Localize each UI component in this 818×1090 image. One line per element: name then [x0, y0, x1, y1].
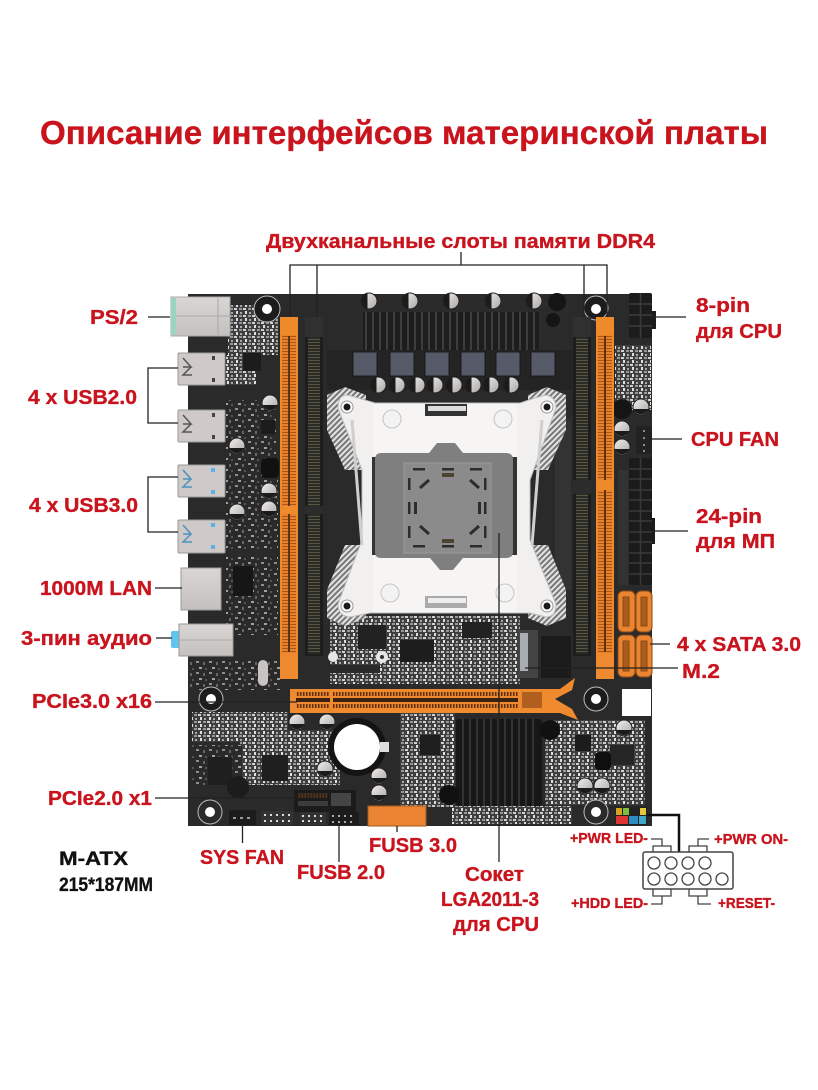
pins: [648, 857, 728, 885]
FUSB 3.0 connector: [368, 806, 426, 826]
label: CPU FAN: CPU FAN: [691, 428, 779, 451]
PS/2 port: [171, 297, 230, 336]
VRM chokes: [353, 352, 555, 376]
8-pin CPU power connector: [629, 293, 656, 338]
white label: [622, 689, 651, 716]
header pins: [541, 636, 571, 678]
label: PCIe3.0 x16: PCIe3.0 x16: [32, 690, 152, 713]
DDR4 slot orange left: [280, 317, 298, 679]
label: socket: для CPU: [453, 913, 539, 936]
panel: motherboard: [171, 293, 656, 826]
LAN port: [181, 568, 221, 610]
label: USB3.0: 4 x USB3.0: [29, 494, 138, 517]
label: HDD LED: +HDD LED-: [571, 895, 648, 912]
label: SATA: 4 x SATA 3.0: [677, 633, 801, 656]
mounting hole right: [584, 687, 608, 711]
thick cable: [647, 815, 679, 852]
label: SYS FAN: SYS FAN: [200, 846, 284, 869]
other headers: [261, 811, 326, 825]
audio port: [171, 624, 233, 656]
top capacitors: [361, 293, 566, 327]
label: socket: Сокет: [465, 863, 524, 886]
mounting hole top right: [584, 296, 608, 320]
board PCB: [188, 294, 652, 826]
mounting hole top left: [254, 296, 280, 322]
CPU fan header: [636, 426, 652, 454]
SYS FAN header: [229, 810, 256, 825]
label: 24-pin: для МП: [696, 530, 775, 553]
label: socket: [441, 863, 539, 936]
USB 3.0 port lower: [178, 520, 225, 553]
label: 8-pin: 8-pin: [696, 294, 750, 317]
title: Описание интерфейсов материнской платы: [40, 114, 768, 151]
label: LAN: 1000M LAN: [40, 577, 152, 600]
label: 24-pin: 24-pin: [696, 505, 762, 528]
USB 2.0 port upper: [178, 353, 225, 385]
white nuts: [328, 651, 388, 663]
24-pin power connector: [629, 458, 655, 585]
label: FUSB 2.0: FUSB 2.0: [297, 861, 385, 884]
mounting hole bottom left: [198, 800, 222, 824]
connector body: [643, 852, 733, 889]
label: form factor: [59, 849, 153, 896]
leader lines: [148, 252, 688, 862]
PCIe x16 slot: [290, 678, 578, 720]
label: M.2: M.2: [682, 660, 720, 683]
label: DDR4 slots: Двухканальные слоты памяти DDR4: [266, 231, 656, 253]
USB 3.0 port upper: [178, 465, 225, 497]
label: form factor: 215*187MM: [59, 875, 153, 896]
front panel pins: [615, 807, 647, 825]
label: USB2.0: 4 x USB2.0: [28, 386, 137, 409]
label: PWR LED: +PWR LED-: [570, 830, 648, 847]
VRM heatsink: [336, 294, 568, 350]
DDR4 slot black left: [305, 317, 323, 676]
label: RESET: +RESET-: [718, 895, 775, 912]
label: audio: 3-пин аудио: [21, 627, 152, 650]
M.2 slot: [518, 630, 538, 678]
right side caps: [612, 399, 649, 585]
mounting hole left middle: [199, 687, 223, 711]
left caps: [229, 353, 279, 686]
PCIe caps: [208, 714, 387, 801]
SATA ports: [618, 591, 652, 677]
mounting hole bottom right: [584, 800, 608, 824]
pin leads: [651, 839, 711, 904]
label: PCIe2.0 x1: PCIe2.0 x1: [48, 787, 152, 810]
label: 24-pin: [696, 505, 775, 553]
right bottom components: [575, 720, 632, 794]
CPU socket frame: [327, 387, 566, 626]
label: socket: LGA2011-3: [441, 888, 539, 911]
label: PWR ON: +PWR ON-: [714, 831, 788, 848]
silkscreen areas: [190, 305, 651, 824]
FUSB 2.0 header: [329, 812, 359, 825]
CMOS battery: [328, 718, 389, 776]
chipset heatsink: [439, 719, 560, 806]
label: 8-pin: [696, 294, 782, 343]
CPU socket LGA plate: [375, 443, 513, 570]
capacitors row: [370, 377, 519, 393]
front panel connector diagram: [570, 815, 788, 912]
label: 8-pin: для CPU: [696, 320, 782, 343]
label: form factor: M-ATX: [59, 849, 128, 870]
USB 2.0 port lower: [178, 410, 225, 442]
DDR4 slot orange right: [596, 317, 614, 679]
PCIe x1 slots: [294, 790, 356, 812]
label: FUSB 3.0: FUSB 3.0: [369, 834, 457, 857]
DDR4 slot black right: [573, 317, 591, 676]
label: PS/2: PS/2: [90, 306, 138, 329]
